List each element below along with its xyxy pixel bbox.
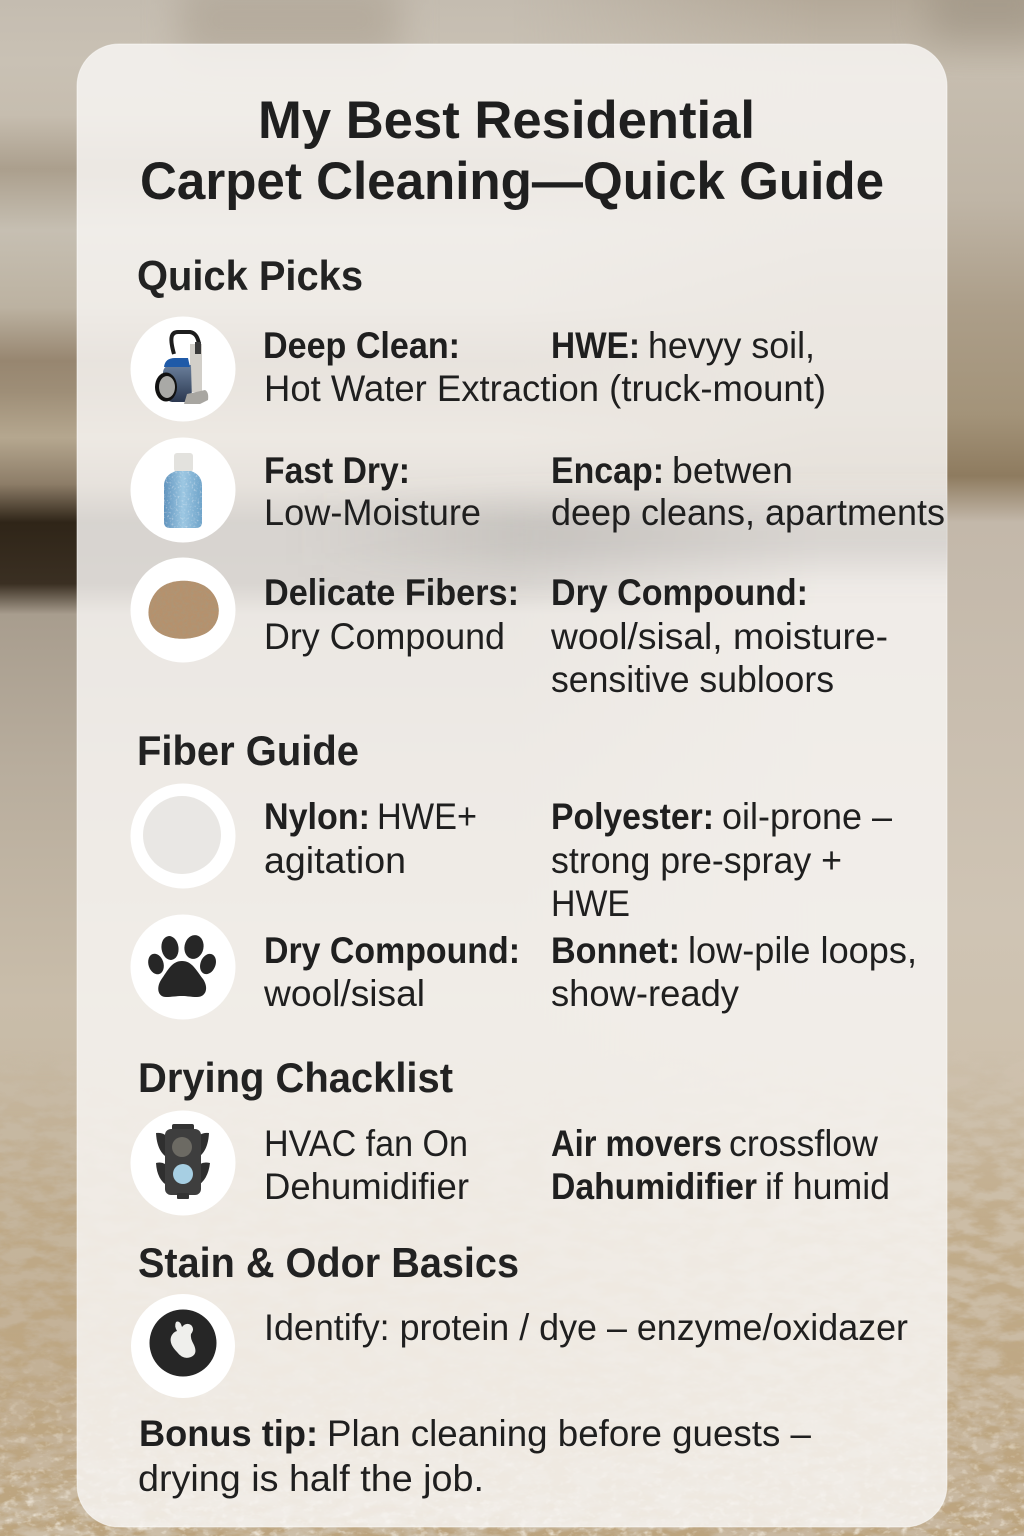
- icon: stain spot: [131, 1294, 235, 1398]
- section: Stain and Odor Basics: [131, 1239, 908, 1398]
- row: Fast Dry: deep cleans, apartments: [551, 492, 945, 533]
- bonus tip: Bonus tip:: [139, 1413, 318, 1454]
- icon: black paw print: [130, 914, 236, 1020]
- row: drying items: HVAC fan On: [264, 1123, 468, 1164]
- icon: dry compound ball: [130, 558, 236, 662]
- row: Delicate Fibers: Delicate Fibers:: [264, 572, 519, 613]
- heading: Fiber Guide: Fiber Guide: [137, 727, 359, 774]
- row: Delicate Fibers: Dry Compound:: [551, 572, 808, 613]
- bonus tip: Plan cleaning before guests –: [327, 1413, 811, 1454]
- row: Nylon and Polyester: agitation: [264, 840, 406, 881]
- icon: traffic light: [130, 1110, 236, 1216]
- text: identify: Identify: protein / dye – enzyme/oxidazer: [264, 1307, 908, 1348]
- row: Delicate Fibers: [264, 572, 888, 700]
- heading: Stain & Odor Basics: Stain & Odor Basics: [138, 1239, 519, 1286]
- row: drying items: [264, 1123, 890, 1207]
- row: Nylon and Polyester: HWE: [551, 883, 630, 924]
- row: Nylon and Polyester: strong pre-spray +: [551, 840, 842, 881]
- row: Dry Compound and Bonnet: [263, 930, 917, 1014]
- row: Deep Clean: hevyy soil,: [648, 325, 815, 366]
- row: Deep Clean: [263, 325, 826, 409]
- row: Delicate Fibers: wool/sisal, moisture-: [550, 616, 888, 657]
- icon: carpet extractor machine: [130, 316, 236, 422]
- row: Nylon and Polyester: Nylon:: [264, 796, 370, 837]
- row: Dry Compound and Bonnet: show-ready: [551, 973, 739, 1014]
- row: Deep Clean: Hot Water Extraction (truck-mount): [264, 368, 826, 409]
- row: Deep Clean: HWE:: [551, 325, 640, 366]
- title: [140, 91, 884, 211]
- row: Dry Compound and Bonnet: Bonnet:: [551, 930, 680, 971]
- section: Drying Checklist: [130, 1054, 890, 1216]
- row: Fast Dry: betwen: [672, 450, 793, 491]
- heading: Quick Picks: Quick Picks: [137, 252, 363, 299]
- section: Fiber Guide: [130, 727, 917, 1020]
- row: Fast Dry: Encap:: [551, 450, 664, 491]
- row: drying items: crossflow: [729, 1123, 878, 1164]
- row: Nylon and Polyester: Polyester:: [551, 796, 714, 837]
- icon: white fiber pad: [130, 784, 236, 888]
- title: Carpet Cleaning—Quick Guide: [140, 152, 884, 211]
- title: My Best Residential: [258, 91, 755, 150]
- icon: blue bottle: [130, 438, 236, 542]
- bonus tip: [138, 1413, 811, 1499]
- row: Deep Clean: Deep Clean:: [263, 325, 460, 366]
- row: Dry Compound and Bonnet: wool/sisal: [263, 973, 425, 1014]
- row: Delicate Fibers: sensitive subloors: [551, 659, 834, 700]
- row: Nylon and Polyester: oil-prone –: [722, 796, 892, 837]
- row: Fast Dry: [264, 450, 945, 533]
- row: Nylon and Polyester: [264, 796, 892, 924]
- row: drying items: Dahumidifier: [551, 1166, 757, 1207]
- row: Delicate Fibers: Dry Compound: [264, 616, 505, 657]
- row: drying items: Dehumidifier: [264, 1166, 469, 1207]
- row: Dry Compound and Bonnet: Dry Compound:: [264, 930, 520, 971]
- row: Dry Compound and Bonnet: low-pile loops,: [688, 930, 917, 971]
- row: drying items: if humid: [765, 1166, 890, 1207]
- heading: Drying Chacklist: Drying Chacklist: [138, 1054, 453, 1101]
- panel shadow band: [300, 505, 1000, 565]
- row: Fast Dry: Low-Moisture: [264, 492, 481, 533]
- row: Nylon and Polyester: HWE+: [377, 796, 477, 837]
- bonus tip: drying is half the job.: [138, 1458, 484, 1499]
- row: Fast Dry: Fast Dry:: [264, 450, 410, 491]
- section: Quick Picks: [130, 252, 945, 700]
- row: drying items: Air movers: [551, 1123, 722, 1164]
